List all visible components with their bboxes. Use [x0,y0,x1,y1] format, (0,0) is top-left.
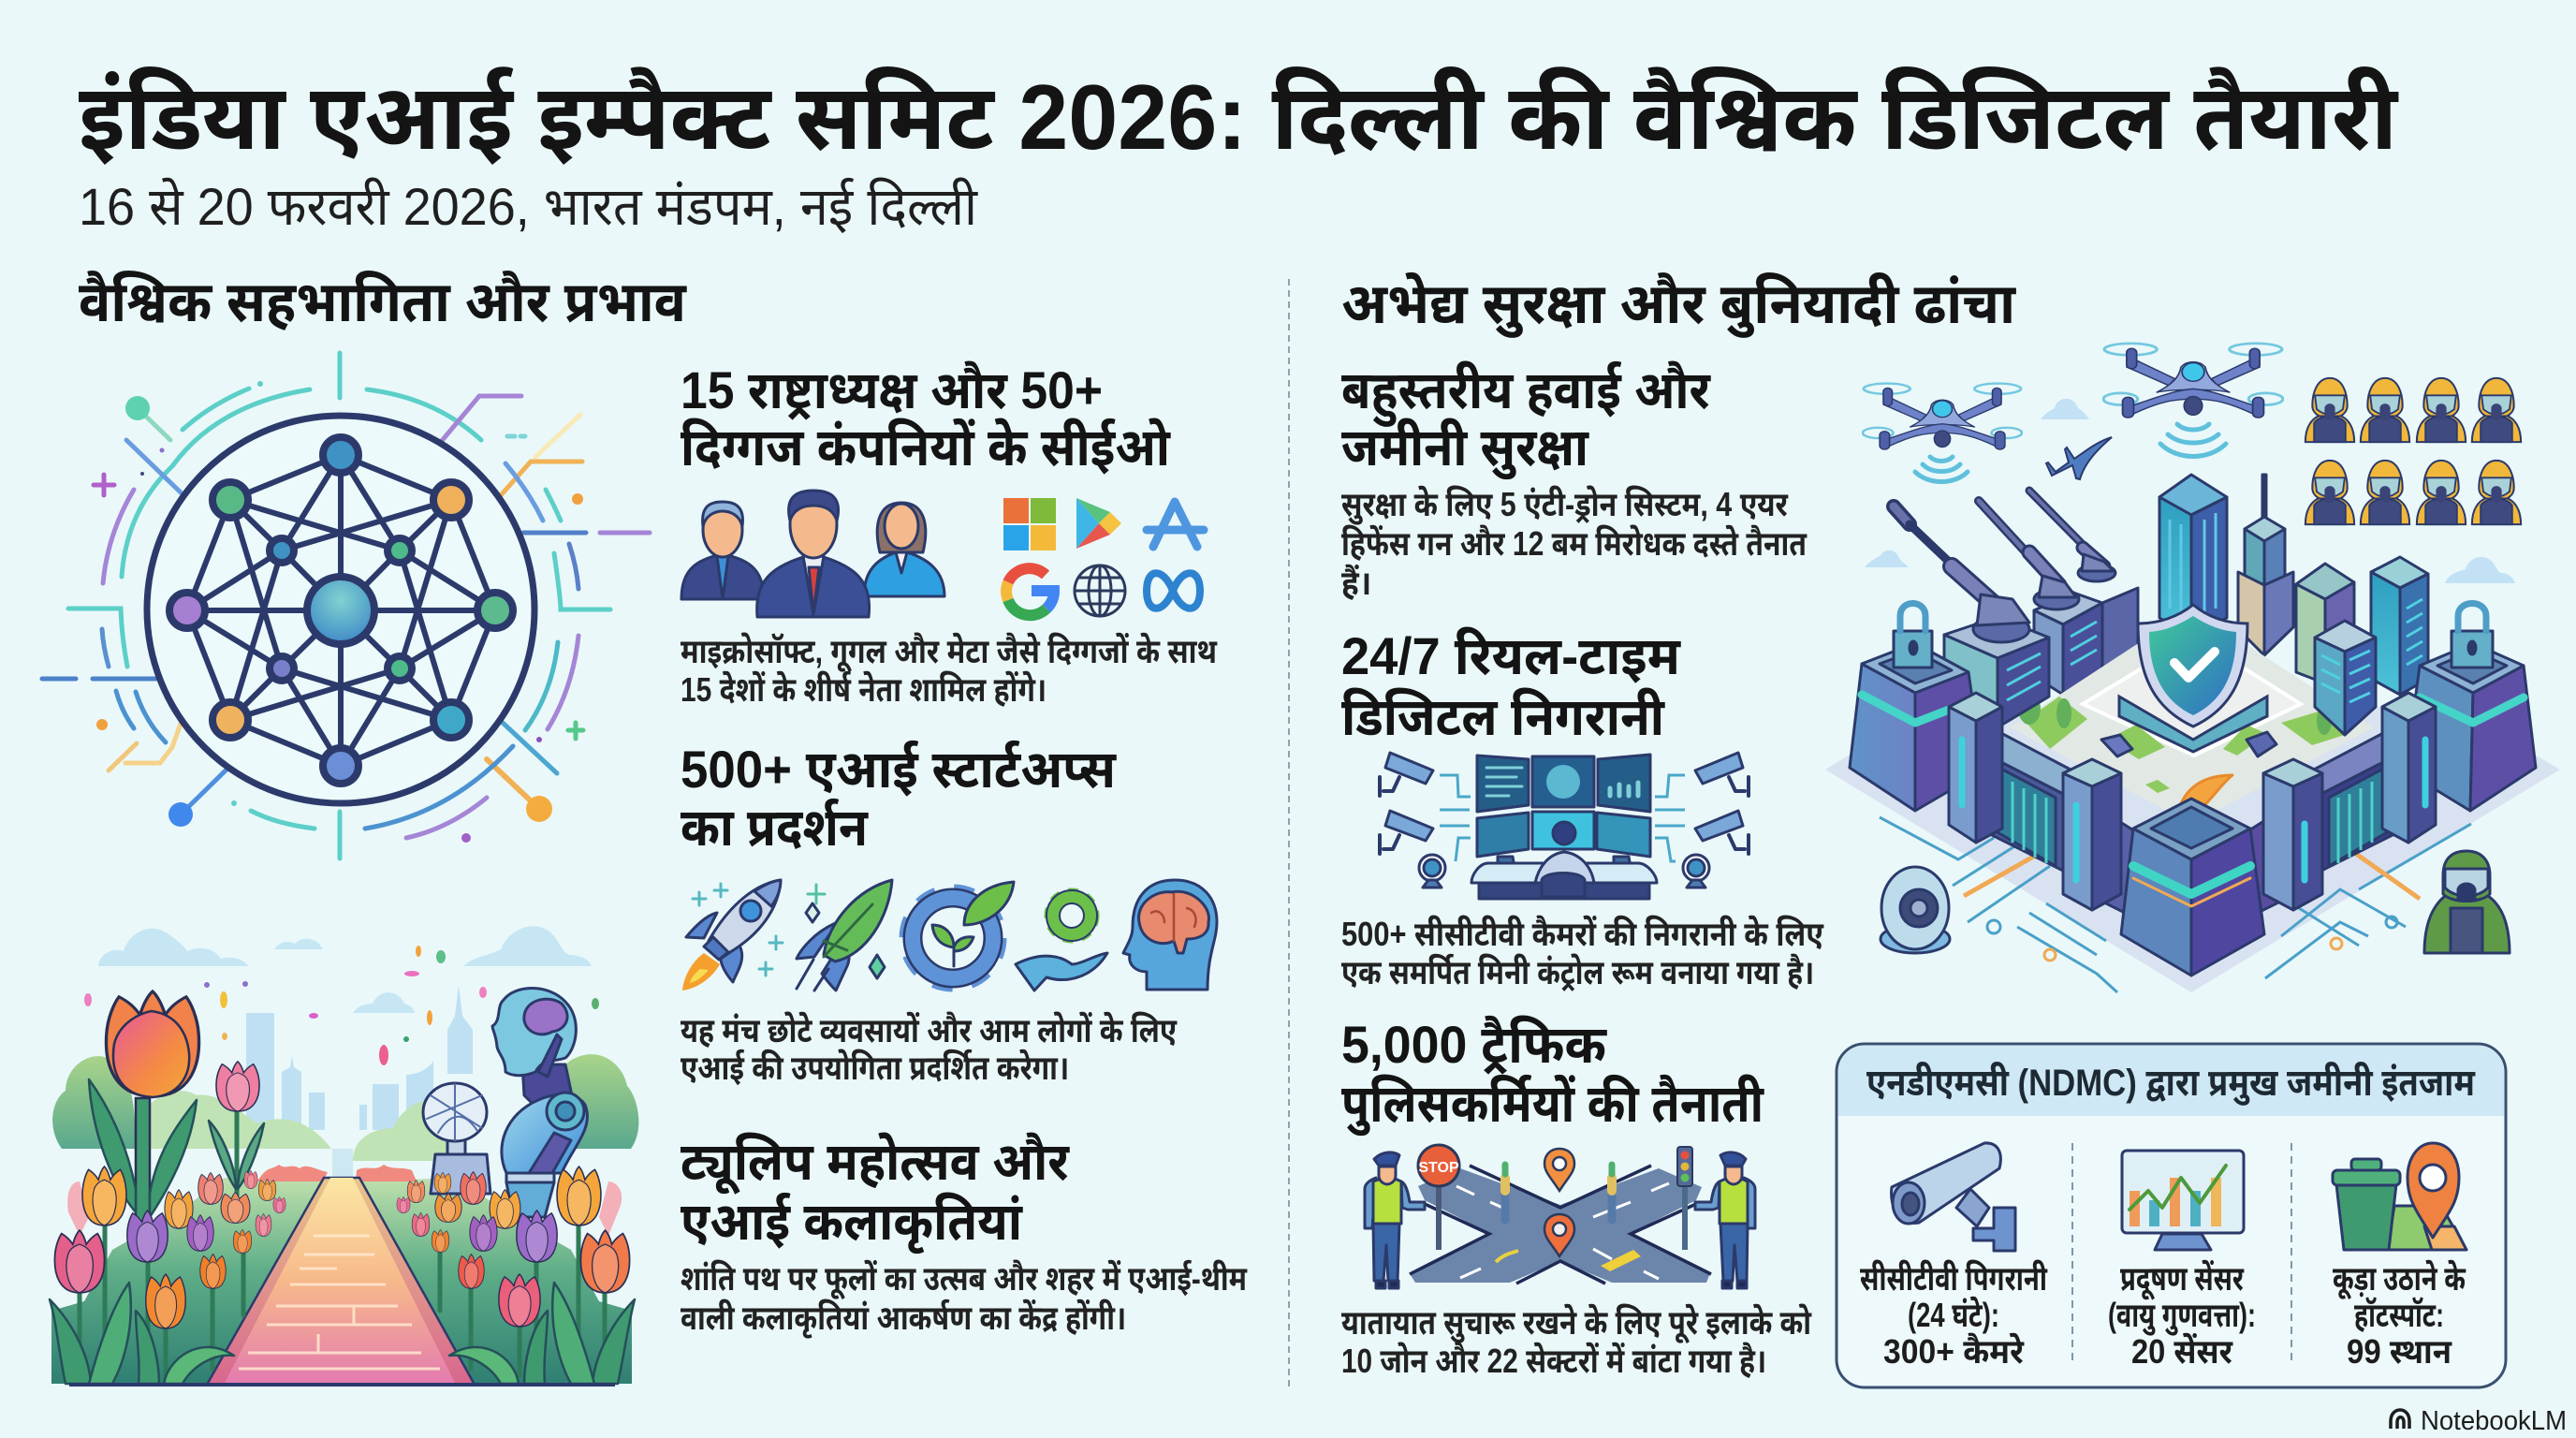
trees [52,1054,638,1177]
heading [1341,626,1681,746]
description [1341,484,1808,602]
column: garbage hotspots: कूड़ा उठाने के [2333,1258,2466,1299]
section heading: security and infrastructure: अभेद्य सुरक्षा और बुनियादी ढांचा [1341,272,2016,339]
icon: tech logos [1003,498,1204,616]
description: यह मंच छोटे व्यवसायों और आम लोगों के लिए [681,1010,1178,1049]
dome camera [1881,867,1950,953]
illustration: bomb squad soldiers [2305,378,2521,524]
illustration: traffic junction [1365,1145,1755,1288]
gate pillars [1949,693,2436,927]
heading: एआई कलाकृतियां [681,1192,1023,1255]
column: CCTV: 300+ कैमरे [1883,1331,2025,1371]
icon: CCTV camera [1892,1143,2015,1251]
description: 10 जोन और 22 सेक्टरों में बांटा गया है। [1341,1341,1766,1380]
heading [1341,360,1711,480]
small officers [1505,1165,1612,1220]
heading: पुलिसकर्मियों की तैनाती [1341,1074,1764,1137]
description: सुरक्षा के लिए 5 एंटी-ड्रोन सिस्टम, 4 एयर [1341,484,1789,525]
column: garbage hotspots: 99 स्थान [2347,1332,2452,1371]
shield monument [2119,605,2267,752]
illustration: drones and plane [1863,344,2283,481]
watermark: NotebookLM: NotebookLM [2421,1406,2567,1436]
item: heads of state and CEOs [681,360,1218,709]
flower beds [51,1178,329,1384]
description: वाली कलाकृतियां आकर्षण का केंद्र होंगी। [681,1299,1126,1340]
column: CCTV: सीसीटीवी पिगरानी [1860,1259,2048,1298]
column: pollution sensor [2108,1151,2256,1371]
section heading: global participation: वैश्विक सहभागिता और प्रभाव [79,271,688,333]
distant tulip rows [67,1165,622,1236]
column: CCTV: (24 घंटे): [1908,1295,1999,1334]
description: 15 देशों के शीर्ष नेता शामिल होंगे। [681,669,1046,709]
description: हैं। [1341,564,1371,602]
heading: 15 राष्ट्राध्यक्ष और 50+ [681,360,1103,420]
heading: डिजिटल निगरानी [1341,687,1665,746]
left and right gate walls [1988,731,2396,871]
column divider [1288,279,1290,1387]
description [1341,914,1824,992]
heading: 500+ एआई स्टार्टअप्स [681,740,1118,799]
heading [681,740,1118,857]
description [681,1010,1178,1087]
column: pollution sensor: (वायु गुणवत्ता): [2108,1296,2256,1336]
column: pollution sensor: 20 सेंसर [2131,1332,2233,1371]
petals [84,946,599,1065]
heading: दिग्गज कंपनियों के सीईओ [681,418,1172,477]
description: शांति पथ पर फूलों का उत्सब और शहर में एआई-थीम [681,1259,1247,1299]
card: NDMC ground arrangements [1837,1044,2506,1387]
right officer [1695,1152,1755,1288]
skyline [246,985,473,1130]
description: हिफेंस गन और 12 बम मिरोधक दस्ते तैनात [1341,523,1808,563]
column: pollution sensor: प्रदूषण सेंसर [2120,1259,2245,1300]
heading: का प्रदर्शन [681,798,869,857]
item: 24/7 digital monitoring [1341,626,1824,992]
subtitle: 16 से 20 फरवरी 2026, भारत मंडपम, नई दिल्ली [79,177,978,236]
description [681,631,1218,709]
title: इंडिया एआई इम्पैक्ट समिट 2026: दिल्ली की वैश्विक डिजिटल तैयारी [79,66,2399,169]
AI robot sculpture [492,989,587,1217]
icons: startup row [682,880,1217,990]
heading: ट्यूलिप महोत्सव और [681,1132,1070,1195]
stop sign [1418,1145,1459,1250]
description: एक समर्पित मिनी कंट्रोल रूम वनाया गया है। [1341,952,1814,992]
courtyard [2010,609,2374,824]
corner towers with locks [1850,603,2536,811]
item: 500+ startups [681,740,1217,1087]
column: garbage hotspots: हॉटस्पॉट: [2354,1296,2444,1334]
column: CCTV [1860,1143,2048,1371]
description: यातायात सुचारू रखने के लिए पूरे इलाके को [1341,1302,1812,1343]
illustration: global network circle [42,353,650,858]
stop sign: STOP [1418,1160,1459,1176]
card header: एनडीएमसी (NDMC) द्वारा प्रमुख जमीनी इंतजाम [1866,1062,2476,1106]
illustration: control room [1380,753,1749,899]
description: माइक्रोसॉफ्ट, गूगल और मेटा जैसे दिग्गजों के साथ [681,631,1218,672]
gun tower [1944,617,2049,727]
illustration: isometric fortress [1825,399,2560,992]
description: 500+ सीसीटीवी कैमरों की निगरानी के लिए [1341,914,1824,953]
map pins [1544,1149,1574,1256]
left officer [1365,1152,1425,1288]
description: एआई की उपयोगिता प्रदर्शित करेगा। [681,1048,1069,1087]
item: traffic police [1341,1015,1812,1380]
brick path [207,1178,475,1385]
heading [681,360,1172,477]
item: tulip festival [681,1132,1247,1340]
description [681,1259,1247,1340]
heading: जमीनी सुरक्षा [1341,418,1589,480]
item: multilayer air and ground security [1341,360,1808,602]
icon: monitor with chart [2122,1151,2244,1250]
ground plate [1825,707,2560,992]
traffic light [1677,1147,1692,1250]
heading: 24/7 रियल-टाइम [1341,626,1681,685]
heading [1341,1015,1764,1137]
heading: 5,000 ट्रैफिक [1341,1015,1607,1075]
clouds [98,926,592,1013]
icon: bin and map pin [2333,1143,2466,1250]
globe sculpture [423,1083,490,1194]
heading: बहुस्तरीय हवाई और [1341,360,1711,427]
anti-aircraft guns [1894,491,2115,642]
front keep with flag [2121,775,2264,976]
heading [681,1132,1070,1255]
description [1341,1302,1812,1380]
card header [1838,1046,2504,1116]
ground line [69,1383,615,1387]
front tall building [2315,621,2376,735]
circuit traces [1880,817,2471,992]
tulip heads [54,991,630,1328]
illustration: tulip path and AI sculpture [50,926,638,1385]
column: garbage hotspots [2333,1143,2466,1371]
tulip stems and leaves [80,1112,605,1376]
skyline towers [2034,475,2428,695]
clouds [1865,399,2515,583]
icon: leaders [681,491,944,617]
bomb disposal soldier [2424,851,2510,953]
